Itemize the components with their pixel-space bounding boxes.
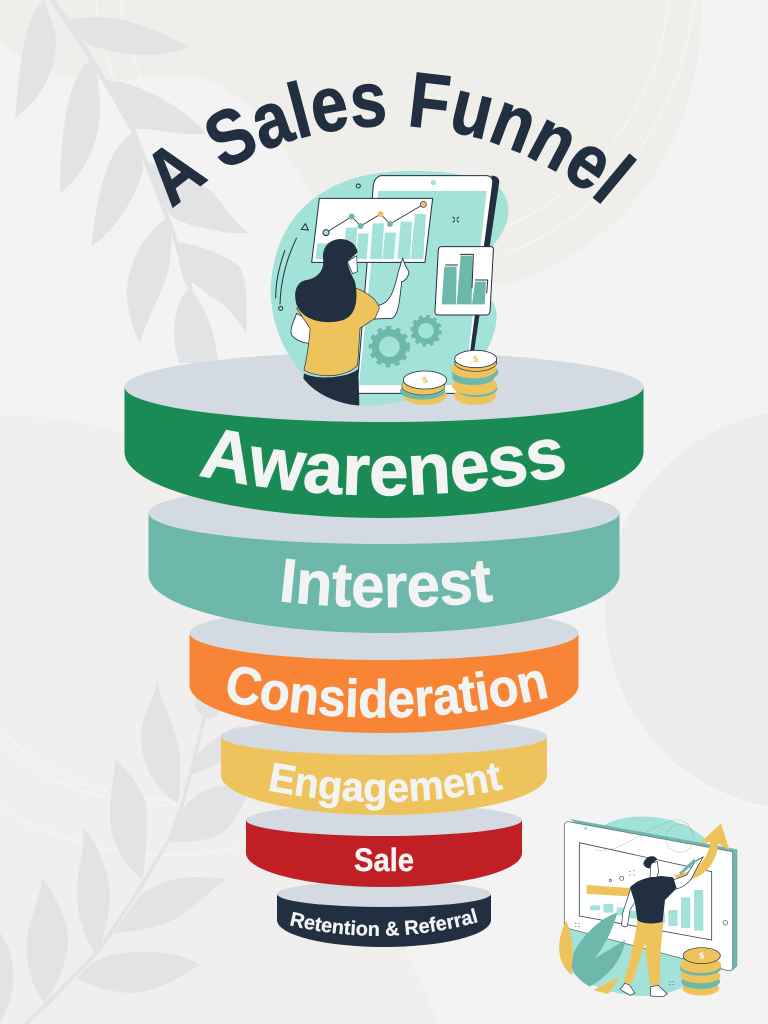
funnel tier 4: engagement <box>221 724 547 815</box>
dollar sign: $ <box>422 375 428 385</box>
label: interest: Interest <box>282 558 494 608</box>
dollar sign: $ <box>472 354 479 364</box>
illustration: woman analysing charts on tablet <box>271 171 508 406</box>
funnel tier 2: interest <box>148 496 620 633</box>
bar chart card <box>435 247 493 315</box>
funnel tier 5: sale <box>246 804 522 887</box>
coin stack: tall <box>451 350 498 405</box>
man figure <box>620 856 703 997</box>
funnel tier 3: consideration <box>190 618 578 733</box>
coin stack: small <box>400 371 447 405</box>
dollar sign: $ <box>698 950 705 961</box>
small decorative marks <box>276 184 459 310</box>
gears <box>371 317 440 365</box>
label: consideration: Consideration <box>228 666 548 718</box>
illustration: man drawing growth arrow <box>559 816 737 997</box>
label: engagement: Engagement <box>269 762 504 811</box>
plants <box>559 913 625 994</box>
sparkle marks <box>575 871 674 985</box>
funnel tier 6: retention and referral <box>277 884 491 947</box>
background leaves: bottom branch <box>0 679 250 1024</box>
title: A Sales Funnel <box>152 72 637 208</box>
woman figure <box>291 239 409 406</box>
label: sale: Sale <box>354 842 414 878</box>
line chart card <box>312 198 433 262</box>
label: awareness: Awareness <box>199 430 565 496</box>
background leaves: top branch <box>15 0 250 363</box>
trend bars <box>590 890 703 931</box>
funnel tier 1: awareness <box>124 354 644 518</box>
growth arrow <box>673 823 729 882</box>
label: retention and referral: Retention & Referral <box>290 908 478 936</box>
coin stack <box>680 948 721 996</box>
